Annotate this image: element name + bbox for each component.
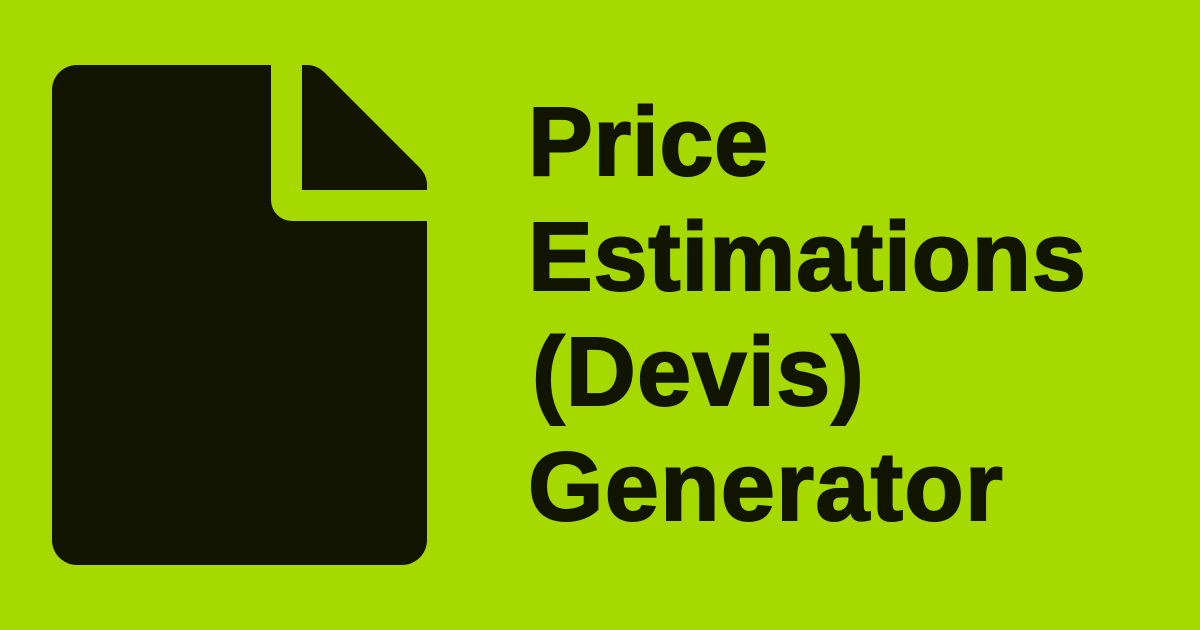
title: Price bbox=[528, 87, 769, 196]
title: Estimations bbox=[528, 202, 1087, 311]
title bbox=[528, 87, 1087, 541]
title: (Devis) bbox=[532, 317, 865, 426]
title: Generator bbox=[528, 432, 1004, 541]
